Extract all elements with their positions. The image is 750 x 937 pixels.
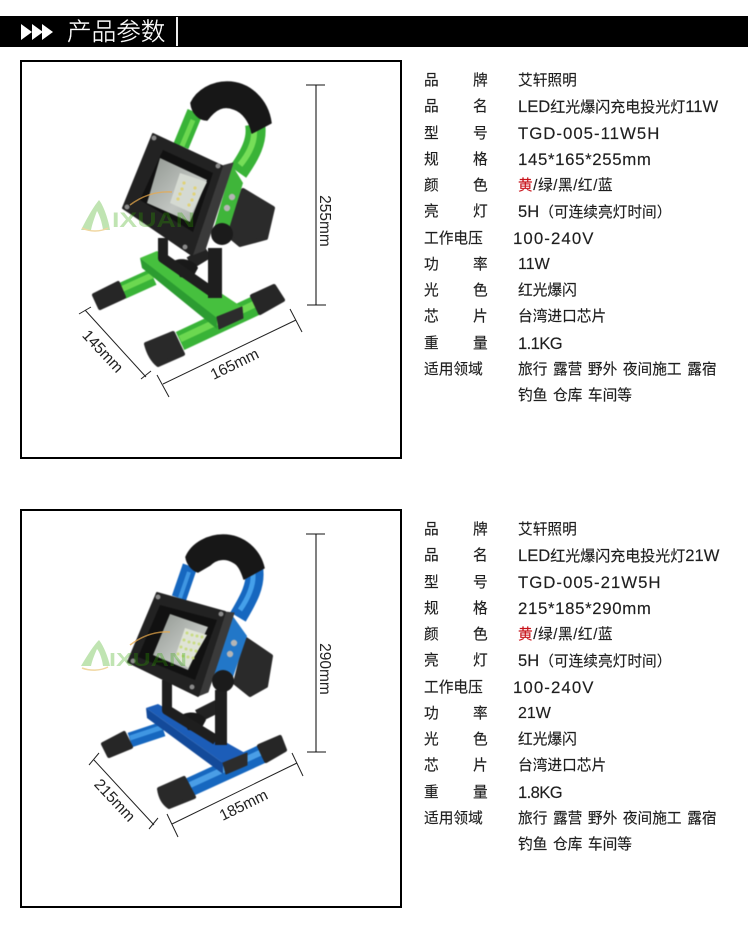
rear tube — [122, 275, 153, 291]
row: name: LED红光爆闪充电投光灯11W — [518, 97, 718, 116]
row: color: 颜 — [424, 627, 439, 643]
heading divider — [176, 17, 178, 46]
lamp cavity — [138, 605, 217, 680]
lamp front frame — [128, 593, 225, 696]
row: applications — [424, 810, 717, 827]
front left cap — [146, 333, 183, 365]
row: chip: 台湾进口芯片 — [518, 309, 606, 325]
product: 21W blue floodlight — [103, 535, 285, 807]
row: brand: 艾轩照明 — [518, 73, 577, 89]
reflector — [147, 158, 207, 222]
row: name — [424, 97, 718, 116]
row: applications: 适用领域 — [424, 362, 483, 378]
section header bar — [0, 16, 748, 47]
row: model — [424, 124, 660, 143]
lamp side — [198, 612, 234, 696]
row: chip — [424, 757, 606, 774]
heading: product parameters: 产品参数 — [67, 12, 165, 48]
row: name — [424, 546, 720, 565]
row: chip: 片 — [473, 309, 488, 325]
knob — [211, 223, 233, 245]
rear knob — [172, 259, 198, 279]
lamp cavity — [140, 150, 213, 232]
panel: 11W product image frame — [20, 60, 402, 459]
right cap — [252, 286, 283, 313]
row: applications: 旅行 露营 野外 夜间施工 露宿 — [518, 362, 717, 378]
row: size: 格 — [473, 601, 488, 617]
row: brand: 品 — [424, 522, 439, 538]
row: color: 色 — [473, 627, 488, 643]
row: runtime — [424, 202, 671, 221]
row: runtime: 亮 — [424, 653, 439, 669]
row: model: 型 — [424, 575, 439, 591]
handle tubes — [181, 112, 256, 172]
row: voltage: 工作电压 — [424, 231, 483, 247]
row: runtime: 5H（可连续亮灯时间） — [518, 202, 671, 221]
row: light color: 光 — [424, 732, 439, 748]
row: applications — [424, 361, 717, 378]
row: name: 品 — [424, 99, 439, 115]
row: brand: 艾轩照明 — [518, 522, 577, 538]
blue base beam — [146, 704, 245, 763]
row: size: 格 — [473, 152, 488, 168]
row: power: 11W — [518, 256, 550, 273]
green mount plate — [214, 165, 243, 232]
row: applications continued: 钓鱼 仓库 车间等 — [518, 837, 632, 853]
panel: 21W product image frame — [20, 509, 402, 908]
LED dots — [176, 632, 204, 660]
watermark: AIXUAN 11W: IXUAN — [112, 209, 195, 232]
row: runtime — [424, 651, 671, 670]
dimension: depth 215mm: 215mm — [90, 776, 138, 825]
watermark: AIXUAN 11W — [81, 192, 195, 232]
row: chip: 片 — [473, 758, 488, 774]
row: chip — [424, 308, 606, 325]
icon: triple arrows — [21, 24, 53, 40]
row: chip: 芯 — [424, 309, 439, 325]
row: size: 规 — [424, 601, 439, 617]
row: light color: 红光爆闪 — [518, 283, 577, 299]
row: light color — [424, 731, 577, 748]
row: light color: 色 — [473, 732, 488, 748]
base bracket — [163, 238, 215, 298]
watermark: AIXUAN 21W — [81, 632, 187, 670]
watermark: AIXUAN 21W: IXUAN — [109, 650, 187, 670]
green base beam — [140, 251, 242, 320]
row: brand — [424, 521, 577, 538]
row: color — [424, 177, 613, 194]
row: weight — [424, 783, 562, 802]
rear left cap — [94, 283, 124, 308]
row: light color — [424, 282, 577, 299]
rear roller — [198, 706, 218, 716]
row: runtime: 灯 — [473, 653, 488, 669]
row: runtime: 5H（可连续亮灯时间） — [518, 651, 671, 670]
dimension: depth 215mm — [89, 753, 158, 829]
dimension: width 165mm: 165mm — [208, 346, 262, 384]
row: chip: 芯 — [424, 758, 439, 774]
row: name: 品 — [424, 548, 439, 564]
front left cap — [159, 778, 194, 807]
row: color — [424, 626, 613, 643]
row: voltage — [424, 229, 595, 248]
row: color: 黄/绿/黑/红/蓝 — [518, 627, 613, 643]
row: size — [424, 599, 651, 618]
row: weight: 1.8KG — [518, 783, 562, 802]
row: size: 215*185*290mm — [518, 599, 651, 618]
row: voltage: 100-240V — [513, 229, 595, 248]
foam grip — [186, 535, 264, 579]
front tube — [180, 303, 257, 341]
row: brand: 牌 — [473, 522, 488, 538]
LED board — [170, 173, 207, 213]
row: brand: 牌 — [473, 73, 488, 89]
row: model: 号 — [473, 575, 488, 591]
row: size: 规 — [424, 152, 439, 168]
row: applications continued: 钓鱼 仓库 车间等 — [518, 388, 632, 404]
rear tube — [130, 727, 163, 740]
row: power: 功 — [424, 706, 439, 722]
handle tubes — [179, 566, 255, 617]
row: size: 145*165*255mm — [518, 150, 651, 169]
spec table: 11W — [424, 72, 718, 404]
dimension: height 290mm — [306, 534, 333, 752]
row: power — [424, 705, 551, 722]
row: runtime: 亮 — [424, 204, 439, 220]
row: weight: 重 — [424, 785, 439, 801]
row: power: 功 — [424, 257, 439, 273]
row: runtime: 灯 — [473, 204, 488, 220]
dimension: depth 145mm: 145mm — [78, 327, 126, 376]
row: color: 颜 — [424, 178, 439, 194]
row: weight: 量 — [473, 785, 488, 801]
lamp side — [192, 163, 233, 255]
row: voltage — [424, 678, 595, 697]
row: power: 率 — [473, 706, 488, 722]
dimension: height 255mm — [306, 85, 333, 305]
spec table: 21W — [424, 521, 720, 853]
dimension: height 290mm: 290mm — [316, 643, 333, 695]
row: power: 21W — [518, 705, 551, 722]
row: name: 名 — [473, 99, 488, 115]
base end cap — [217, 307, 243, 329]
row: model — [424, 573, 662, 592]
dimension: width 185mm — [167, 753, 303, 837]
row: weight: 量 — [473, 336, 488, 352]
row: voltage: 工作电压 — [424, 680, 483, 696]
product: 11W green floodlight — [94, 82, 283, 365]
lamp front frame — [123, 134, 222, 255]
rear battery — [235, 639, 271, 695]
row: light color: 红光爆闪 — [518, 732, 577, 748]
blue mount plate — [214, 615, 247, 683]
row: applications: 适用领域 — [424, 811, 483, 827]
dimension: width 185mm: 185mm — [217, 787, 271, 825]
row: weight: 重 — [424, 336, 439, 352]
row: model: 型 — [424, 126, 439, 142]
foam grip — [191, 82, 271, 133]
right cap — [259, 737, 285, 761]
row: power — [424, 256, 550, 273]
row: name: LED红光爆闪充电投光灯21W — [518, 546, 719, 565]
dimension: height 255mm: 255mm — [316, 195, 333, 247]
row: model: TGD-005-21W5H — [518, 573, 662, 592]
row: brand — [424, 72, 577, 89]
dimension: width 165mm — [157, 309, 302, 397]
rear battery — [228, 190, 273, 245]
knob — [212, 670, 234, 692]
LED board — [175, 628, 207, 668]
row: weight — [424, 334, 562, 353]
row: color: 黄/绿/黑/红/蓝 — [518, 178, 613, 194]
row: applications: 旅行 露营 野外 夜间施工 露宿 — [518, 811, 717, 827]
base end cap — [223, 753, 247, 774]
row: power: 率 — [473, 257, 488, 273]
row: chip: 台湾进口芯片 — [518, 758, 606, 774]
row: light color: 光 — [424, 283, 439, 299]
row: model: TGD-005-11W5H — [518, 124, 660, 143]
rear left cap — [103, 733, 131, 756]
base bracket — [167, 680, 221, 745]
reflector — [153, 614, 208, 670]
row: weight: 1.1KG — [518, 334, 562, 353]
front tube — [190, 752, 262, 787]
row: size — [424, 150, 651, 169]
row: voltage: 100-240V — [513, 678, 595, 697]
screws — [130, 594, 237, 690]
row: color: 色 — [473, 178, 488, 194]
dimension: depth 145mm — [78, 307, 151, 379]
LED dots — [176, 181, 197, 207]
row: model: 号 — [473, 126, 488, 142]
row: light color: 色 — [473, 283, 488, 299]
rear roller — [190, 252, 208, 263]
row: brand: 品 — [424, 73, 439, 89]
screws — [124, 136, 235, 250]
row: name: 名 — [473, 548, 488, 564]
rear knob — [180, 713, 206, 731]
